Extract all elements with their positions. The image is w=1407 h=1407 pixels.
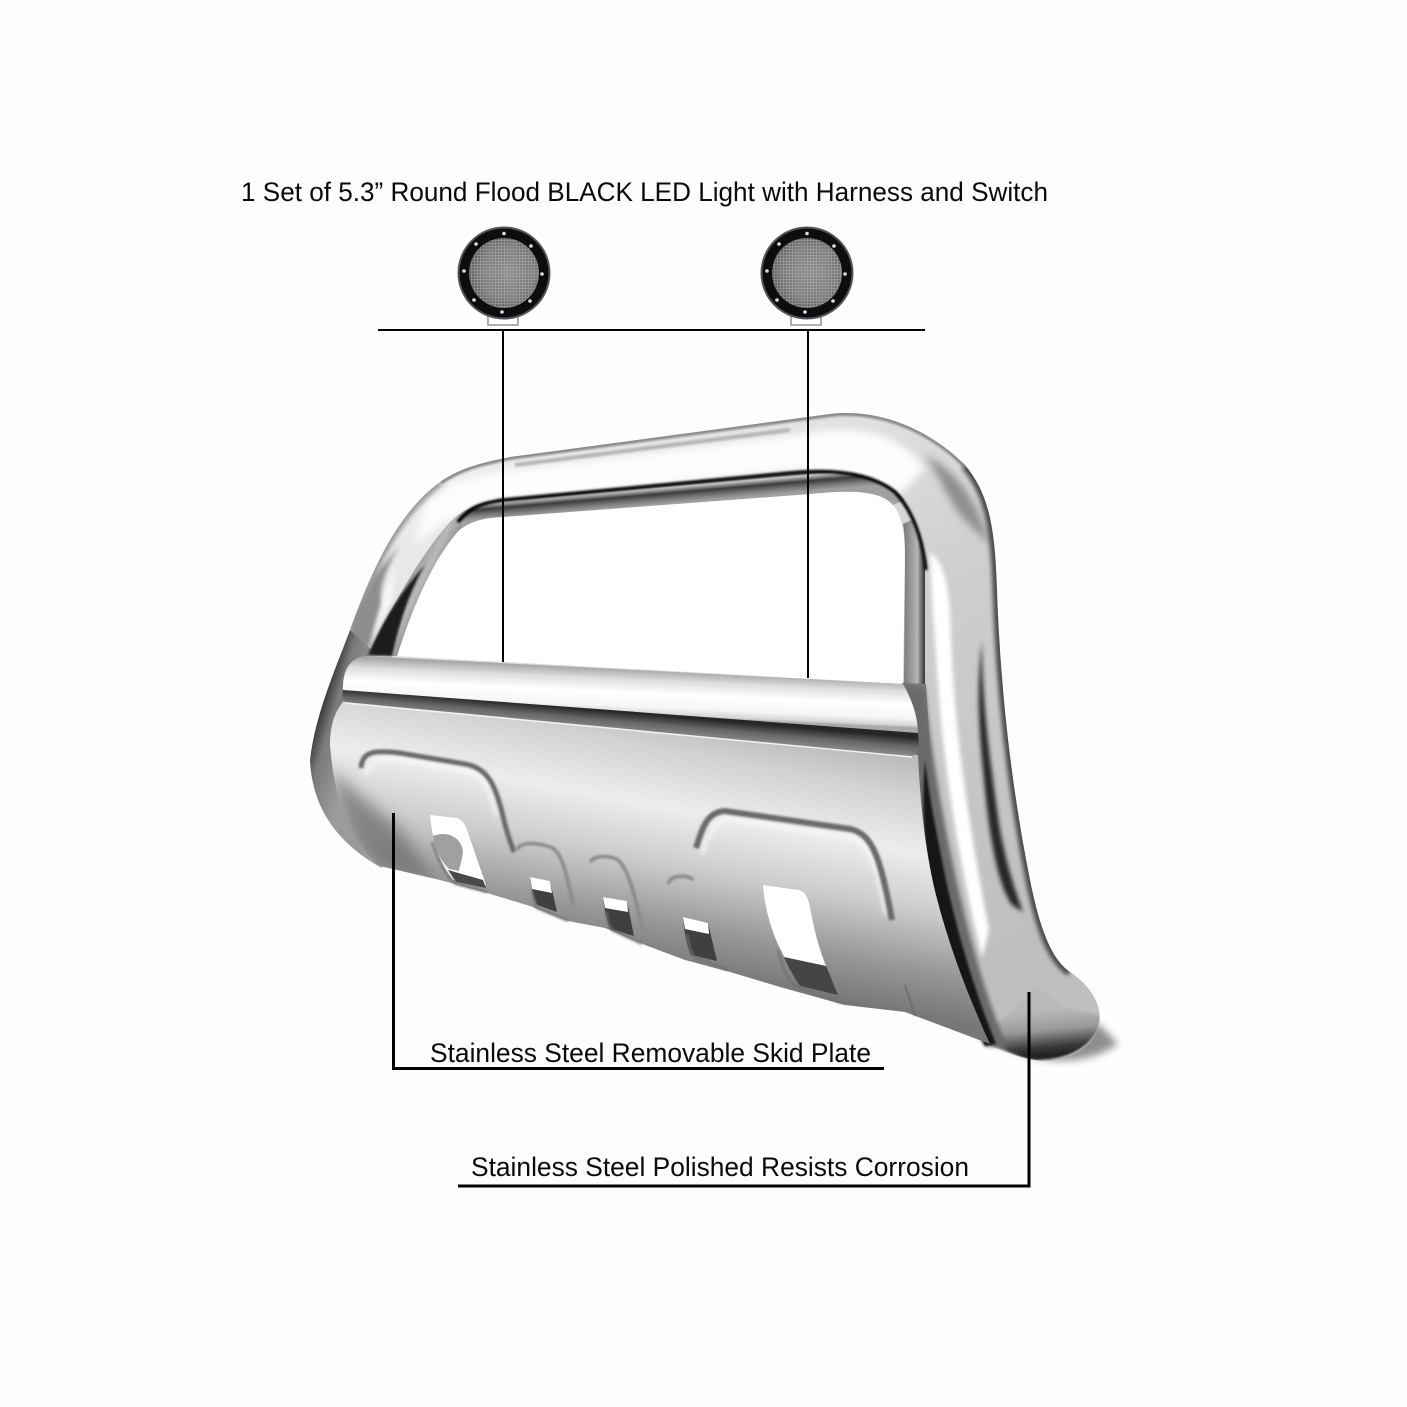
polished hoop tube [310,413,1100,1061]
inner tube [368,471,926,684]
title: 1 Set of 5.3” Round Flood BLACK LED Light with Harness and Switch [241,177,1048,207]
callout: skid plate: Stainless Steel Removable Skid Plate [430,1038,871,1068]
flange rims [432,842,842,1003]
crossbar tube [342,656,919,757]
callout: skid plate [394,813,884,1068]
ground shadow [1000,1025,1118,1060]
callout: polished steel: Stainless Steel Polished Resists Corrosion [471,1152,969,1182]
window opening [397,492,905,684]
icon: right LED flood light [760,226,854,325]
plate crease [905,985,915,1016]
bull bar product illustration [310,413,1118,1061]
embossed ridge: right [696,811,892,920]
embossed ridge highlight [366,759,886,915]
lower dark leg reflection [905,684,1008,1048]
skid plate with cut-outs [330,700,990,1044]
embossed ridge: left [361,752,514,852]
hole 4 [683,917,717,961]
icon: left LED flood light [458,226,550,325]
hole 3 [603,897,634,936]
callout lines: LED lights [378,330,925,678]
callout: polished steel [458,992,1029,1186]
hole 1 [430,815,486,885]
hole 5 [763,885,826,966]
crossbar end chamfer [902,683,931,762]
embossed tabs [517,844,693,935]
plate lower-left shading [330,770,440,885]
hole 2 [530,877,557,912]
